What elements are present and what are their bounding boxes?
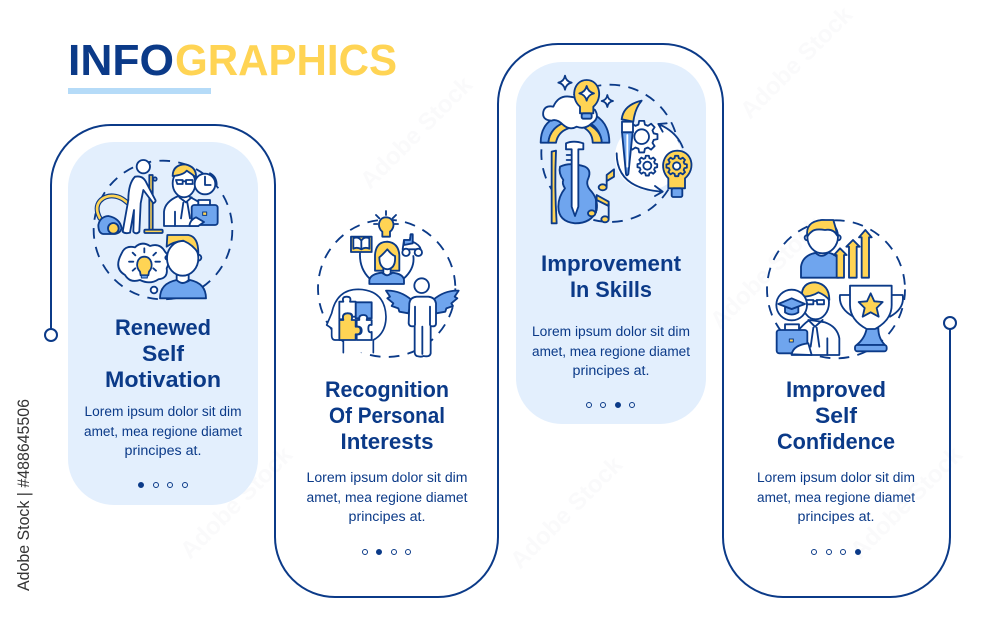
body text: amet, mea regione diamet	[306, 490, 468, 505]
body text: amet, mea regione diamet	[757, 490, 915, 505]
body text	[306, 470, 468, 524]
heading: Recognition	[325, 377, 449, 402]
body text: principes at.	[798, 509, 874, 524]
body text: principes at.	[124, 443, 202, 458]
icon: art, music and skills	[541, 76, 691, 223]
heading	[325, 377, 449, 454]
heading: Improvement	[541, 251, 682, 276]
pagination dots	[362, 550, 410, 554]
body text	[532, 324, 690, 378]
connecting outline	[45, 44, 956, 597]
icon: interests, puzzle head and angel	[318, 211, 459, 357]
icon: cleaning, work and idea	[94, 160, 232, 299]
heading: Self	[142, 341, 185, 366]
heading: Self	[815, 403, 858, 428]
panel: improvement in skills	[532, 76, 691, 408]
body text	[84, 404, 242, 458]
infographic canvas: Adobe Stock	[355, 71, 478, 194]
heading	[105, 315, 221, 392]
infographic canvas: Adobe Stock	[175, 441, 298, 564]
title	[68, 36, 397, 94]
heading: Motivation	[105, 367, 221, 392]
title: INFO	[68, 36, 174, 85]
title: GRAPHICS	[175, 36, 397, 85]
heading: Renewed	[115, 315, 211, 340]
body text: amet, mea regione diamet	[84, 424, 242, 439]
pagination dots	[812, 550, 860, 554]
heading	[777, 377, 895, 454]
pagination dots	[138, 482, 188, 488]
panel: improved self confidence	[757, 220, 915, 554]
pagination dots	[586, 402, 634, 408]
body text: amet, mea regione diamet	[532, 344, 690, 359]
infographic canvas: Adobe Stock	[505, 451, 628, 574]
body text: Lorem ipsum dolor sit dim	[757, 470, 915, 485]
body text: principes at.	[572, 363, 650, 378]
heading: In Skills	[570, 277, 652, 302]
heading	[541, 251, 682, 302]
stock credit text: Adobe Stock | #488645506	[14, 399, 33, 591]
infographic canvas: Adobe Stock	[705, 211, 828, 334]
body text: Lorem ipsum dolor sit dim	[532, 324, 690, 339]
body text: principes at.	[348, 509, 426, 524]
heading: Improved	[786, 377, 886, 402]
panel: recognition of personal interests	[306, 211, 468, 555]
infographic canvas: Adobe Stock	[845, 441, 968, 564]
heading: Interests	[340, 429, 434, 454]
heading: Confidence	[777, 429, 895, 454]
panel: renewed self motivation	[84, 160, 242, 488]
infographic canvas: Adobe Stock	[735, 1, 858, 124]
icon: growth, graduate and trophy	[767, 220, 905, 358]
panel fill: step 1 background	[68, 142, 258, 505]
body text: Lorem ipsum dolor sit dim	[84, 404, 242, 419]
panel fill: step 3 background	[516, 62, 706, 424]
body text	[757, 470, 915, 524]
body text: Lorem ipsum dolor sit dim	[306, 470, 468, 485]
heading: Of Personal	[329, 403, 445, 428]
